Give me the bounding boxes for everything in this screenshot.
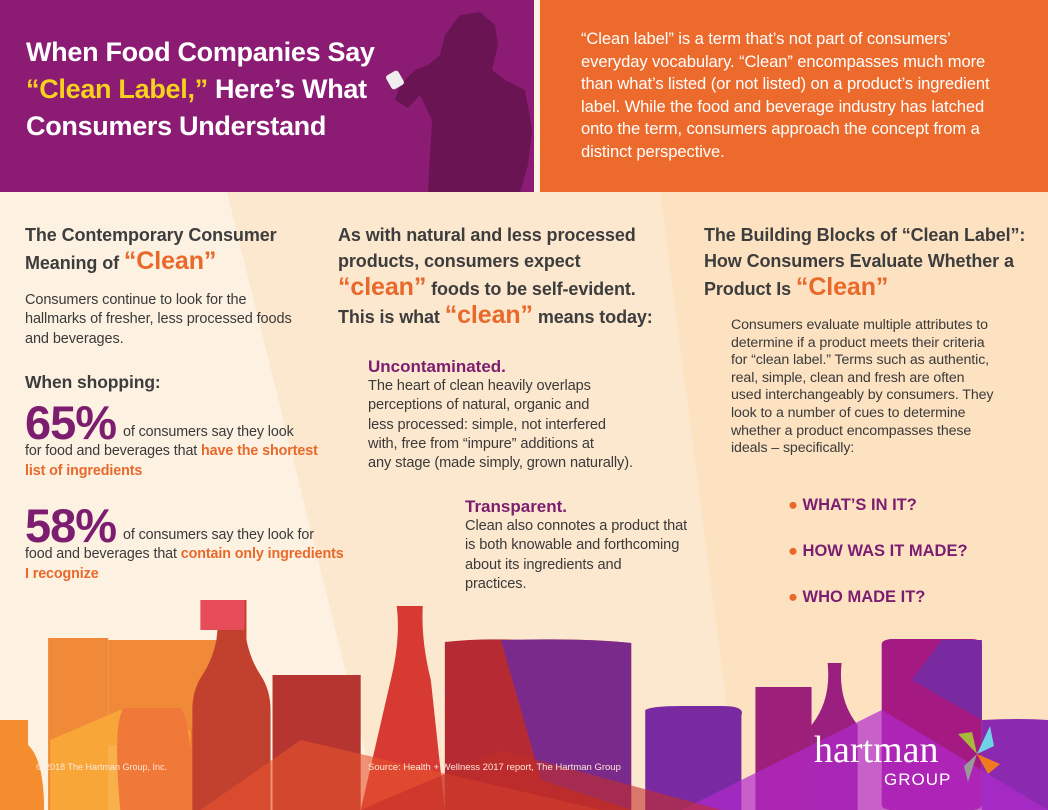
panel: building blocks <box>704 225 1025 606</box>
body: Consumers evaluate multiple attributes to <box>731 317 988 333</box>
silhouette <box>386 12 532 192</box>
uncontaminated <box>368 357 633 471</box>
body: whether a product encompasses these <box>731 423 971 439</box>
uncontaminated: Uncontaminated. <box>368 357 506 376</box>
uncontaminated: The heart of clean heavily overlaps <box>368 378 591 394</box>
header: intro text: label. While the food and beverage industry has latched <box>581 97 984 116</box>
stat 58 <box>25 499 344 582</box>
header: intro text: distinct perspective. <box>581 142 725 161</box>
questions list: ● WHAT’S IN IT? <box>788 496 917 514</box>
body: used interchangeably by consumers. They <box>731 387 993 403</box>
intro: and beverages. <box>25 331 124 347</box>
body: determine if a product meets their criteria <box>731 335 985 351</box>
title: When Food Companies Say <box>26 37 375 67</box>
heading <box>704 225 1025 301</box>
panel: contemporary meaning: 58% <box>25 499 116 552</box>
panel: contemporary meaning: I recognize <box>25 566 99 582</box>
questions list <box>788 496 968 606</box>
panel: contemporary meaning: for food and beverages that have the shortest <box>25 443 318 459</box>
heading: How Consumers Evaluate Whether a <box>704 251 1014 271</box>
logo: hartman <box>814 729 939 771</box>
heading: The Building Blocks of “Clean Label”: <box>704 225 1025 245</box>
logo <box>814 726 1000 789</box>
stat 65 <box>25 396 318 479</box>
heading <box>25 225 277 275</box>
questions list: ● HOW WAS IT MADE? <box>788 542 968 560</box>
header: intro text: than what’s listed (or not listed) on a product’s ingredient <box>581 74 989 93</box>
title <box>26 37 375 141</box>
heading: This is what “clean” means today: <box>338 301 653 329</box>
panel: contemporary meaning: 65% <box>25 396 116 449</box>
transparent <box>465 497 688 592</box>
heading: Product Is “Clean” <box>704 273 888 301</box>
title: “Clean Label,” Here’s What <box>26 74 367 104</box>
body: real, simple, clean and fresh are often <box>731 370 964 386</box>
uncontaminated: with, free from “impure” additions at <box>368 436 594 452</box>
transparent: practices. <box>465 576 526 592</box>
heading: As with natural and less processed <box>338 225 636 245</box>
panel: contemporary meaning: food and beverages that contain only ingredients <box>25 546 344 562</box>
body: ideals – specifically: <box>731 440 854 456</box>
body: look to a number of cues to determine <box>731 405 965 421</box>
header: intro text <box>540 0 1048 192</box>
heading <box>338 225 653 329</box>
uncontaminated: perceptions of natural, organic and <box>368 397 589 413</box>
panel: what clean means <box>338 225 688 592</box>
intro: hallmarks of fresher, less processed foods <box>25 311 292 327</box>
illustration: bottles skyline <box>0 600 1048 810</box>
body: for “clean label.” Terms such as authentic, <box>731 352 989 368</box>
panel: contemporary meaning <box>25 225 344 582</box>
subheading: When shopping: <box>25 372 161 392</box>
heading: Meaning of “Clean” <box>25 247 216 275</box>
uncontaminated: any stage (made simply, grown naturally). <box>368 455 633 471</box>
panel: contemporary meaning: of consumers say they look <box>123 424 294 440</box>
intro <box>25 292 292 347</box>
header: title panel <box>0 0 534 192</box>
transparent: is both knowable and forthcoming <box>465 537 679 553</box>
footer: copyright: © 2018 The Hartman Group, Inc. <box>36 762 167 772</box>
transparent: about its ingredients and <box>465 557 622 573</box>
questions list: ● WHO MADE IT? <box>788 588 925 606</box>
body <box>731 317 994 456</box>
title: Consumers Understand <box>26 111 326 141</box>
panel: contemporary meaning: list of ingredients <box>25 463 142 479</box>
header: intro text: “Clean label” is a term that’s not part of consumers’ <box>581 29 951 48</box>
logo: GROUP <box>884 770 951 789</box>
panel: contemporary meaning: of consumers say they look for <box>123 527 314 543</box>
heading: The Contemporary Consumer <box>25 225 277 245</box>
icon: pinwheel <box>958 726 1000 782</box>
intro: Consumers continue to look for the <box>25 292 246 308</box>
uncontaminated: less processed: simple, not interfered <box>368 417 606 433</box>
transparent: Clean also connotes a product that <box>465 518 687 534</box>
heading: “clean” foods to be self-evident. <box>338 273 636 301</box>
header: intro text: everyday vocabulary. “Clean” encompasses much more <box>581 52 985 71</box>
footer: source: Source: Health + Wellness 2017 report, The Hartman Group <box>368 762 621 773</box>
transparent: Transparent. <box>465 497 567 516</box>
header: intro text: onto the term, consumers approach the concept from a <box>581 119 980 138</box>
heading: products, consumers expect <box>338 251 580 271</box>
